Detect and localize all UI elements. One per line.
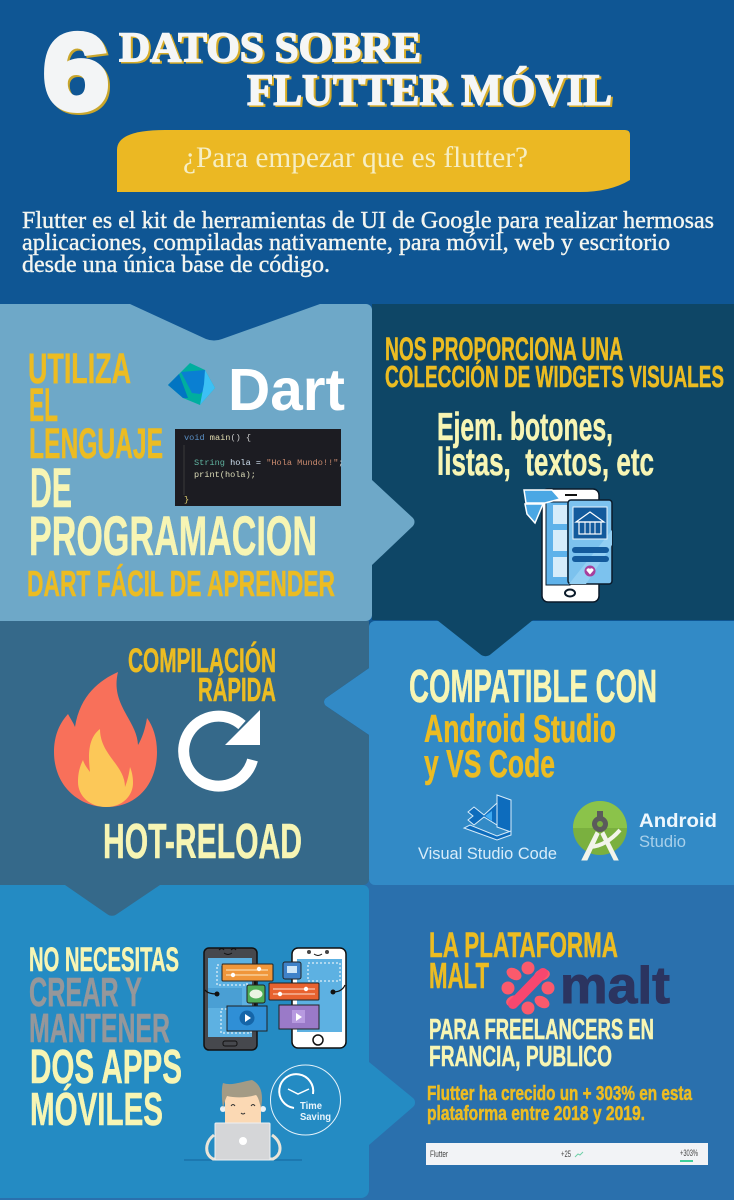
icon: dart logo: Dart [228,357,345,423]
heading: no necesitas crear y mantener dos apps móviles [29,941,182,1135]
heading: no necesitas crear y mantener dos apps móviles: DOS APPS [30,1041,182,1094]
table row: flutter growth: Flutter [430,1149,448,1159]
heading: utiliza el lenguaje: LENGUAJE [29,420,163,468]
heading: compilación rápida: RÁPIDA [198,671,276,708]
heading: no necesitas crear y mantener dos apps móviles: MANTENER [29,1005,170,1051]
table row: flutter growth: +25 [561,1149,571,1159]
heading: hot-reload: HOT-RELOAD [103,815,302,869]
title text: DATOS SOBRE [121,27,423,73]
icon: visual studio code logo [418,795,557,863]
text: flutter ha crecido [427,1082,692,1125]
heading: utiliza el lenguaje [28,345,163,468]
table row: flutter growth: +303% [680,1148,698,1158]
text: para freelancers: FRANCIA, PUBLICO [429,1041,612,1073]
icon: flame [54,672,157,807]
heading: de programacion: PROGRAMACION [29,504,317,567]
title text: FLUTTER MÓVIL [249,67,614,116]
code snippet: String hola = "Hola Mundo!!"; [194,458,344,468]
heading: no necesitas crear y mantener dos apps móviles: MÓVILES [30,1083,163,1135]
heading: no necesitas crear y mantener dos apps móviles: CREAR Y [29,969,142,1015]
title number 6: 6 [45,13,111,134]
text: dart fácil de aprender: DART FÁCIL DE APRENDER [27,563,335,604]
icon: visual studio code logo: Visual Studio Code [418,844,557,863]
icon: phone with app screen [524,489,612,602]
title text: DATOS SOBRE [119,26,421,72]
text: android studio y vs code: y VS Code [424,743,555,786]
icon: malt logo [502,957,670,1015]
panel: dart language [0,304,415,621]
heading: utiliza el lenguaje: EL [29,378,58,431]
heading: la plataforma malt: MALT [429,955,489,996]
text: android studio y vs code: Android Studio [424,708,616,751]
banner: para empezar [117,130,630,192]
intro paragraph: aplicaciones, compiladas nativamente, para móvil, web y escritorio [22,230,670,256]
heading: nos proporciona [385,331,724,394]
text: ejem botones: Ejem. botones, [437,406,613,449]
heading: de programacion: DE [30,456,72,519]
title number 6: 6 [43,11,109,132]
heading: compilación rápida [128,642,276,708]
icon: person with laptop [184,1080,302,1160]
code snippet: void main() { [184,433,251,443]
table row: flutter growth [426,1143,708,1165]
icon: two phones with widgets [204,948,346,1050]
heading: la plataforma malt [429,926,618,996]
icon: reload arrow [184,710,260,786]
code snippet: } [184,495,189,505]
text: para freelancers [429,1014,654,1073]
icon: malt logo: malt [560,957,670,1015]
intro paragraph [22,208,714,278]
icon: time saving badge [270,1065,340,1135]
icon: time saving badge: Saving [300,1111,331,1123]
code snippet: print(hola); [194,470,256,480]
heading: compilación rápida: COMPILACIÓN [128,642,276,680]
heading: utiliza el lenguaje: UTILIZA [28,345,131,393]
panel: compatible con [324,621,734,885]
code snippet [175,429,344,506]
icon: time saving badge: Time [300,1100,322,1112]
intro paragraph: Flutter es el kit de herramientas de UI de Google para realizar hermosas [22,208,714,234]
title text: FLUTTER MÓVIL [247,66,612,114]
icon: dart logo [168,357,345,423]
banner: para empezar: ¿Para empezar que es flutter? [183,141,528,174]
panel: widgets [372,304,734,656]
intro paragraph: desde una única base de código. [22,252,330,278]
text: android studio y vs code [424,708,616,786]
icon: android studio logo [573,801,717,860]
panel: bottom left two apps [0,885,415,1198]
header title [43,11,614,134]
icon: android studio logo: Android [639,811,717,832]
panel: bottom right Malt [0,880,734,1200]
heading: no necesitas crear y mantener dos apps móviles: NO NECESITAS [29,941,179,979]
text: flutter ha crecido: plataforma entre 2018 y 2019. [427,1102,645,1125]
title text [119,26,614,116]
heading: la plataforma malt: LA PLATAFORMA [429,926,618,965]
heading: de programacion [29,456,317,567]
icon: android studio logo: Studio [639,832,686,851]
text: ejem botones [437,406,654,484]
panel: hot reload [0,621,369,916]
